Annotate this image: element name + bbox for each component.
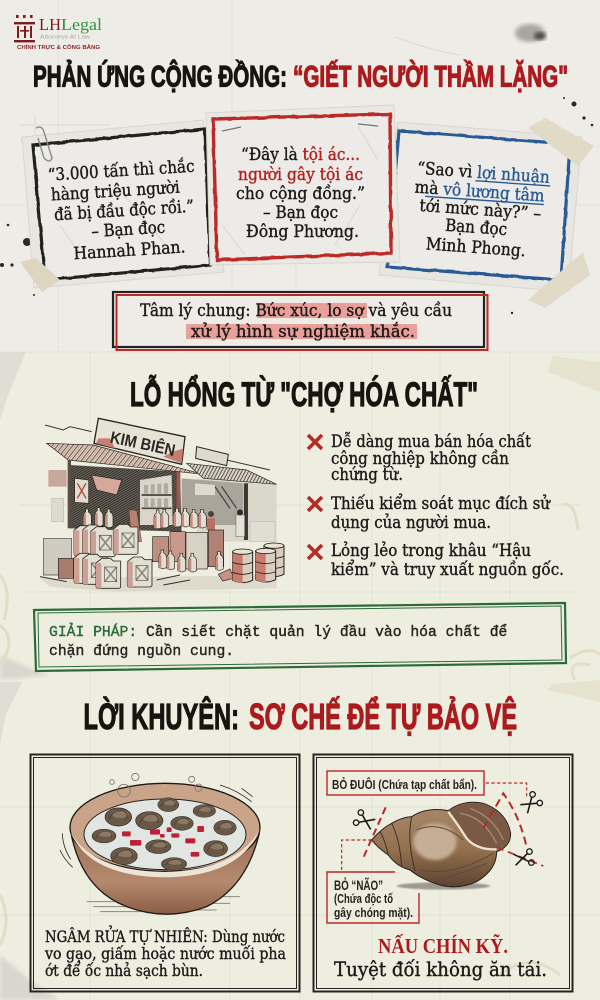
callout: general sentiment: Tâm lý chung: Bức xúc, lo sợ và yêu cầu [140, 301, 452, 320]
illustration: Kim Biên market stall [40, 418, 284, 592]
panel: quote card left: – Bạn đọc [91, 218, 166, 242]
text: loopholes: dụng của người mua. [331, 513, 491, 532]
text: soaking advice: vo gạo, giấm hoặc nước muối pha [44, 944, 286, 963]
panel: quote card left: đã bị đầu độc rồi.” [54, 197, 195, 225]
label: remove tail: BỎ ĐUÔI (Chứa tạp chất bẩn). [332, 777, 477, 792]
panel: preparing the snail [314, 754, 572, 992]
illustration: bowl of snails [60, 773, 260, 914]
text: loopholes: Lỏng lẻo trong khâu “Hậu [331, 541, 531, 560]
label: remove brain: gây chóng mặt). [334, 906, 413, 920]
logo: LHLegal: LH [39, 15, 61, 34]
text: soaking advice: ớt để ốc nhả sạch bùn. [45, 961, 203, 980]
text: soaking advice [44, 924, 286, 980]
text: loopholes [331, 432, 564, 579]
logo: LHLegal: Legal [61, 15, 102, 34]
callout: solution: GIẢI PHÁP: Cần siết chặt quản lý đầu vào hóa chất để [49, 623, 507, 641]
callout: general sentiment: xử lý hình sự nghiệm khắc. [191, 322, 415, 341]
label: remove tail [327, 771, 484, 795]
callout: general sentiment [113, 292, 488, 350]
text: loopholes: Thiếu kiểm soát mục đích sử [331, 494, 551, 513]
text: loopholes: công nghiệp không cần [331, 449, 509, 468]
heading: advice [84, 695, 517, 737]
illustration: Kim Biên market stall: KIM BIÊN [108, 428, 177, 460]
icon: red cross two [308, 497, 322, 511]
panel: quote card right: tới mức này?” – [419, 196, 542, 224]
text: cook thoroughly: Tuyệt đối không ăn tái. [334, 958, 547, 981]
panel: quote card right: mà vô lương tâm [414, 178, 545, 207]
callout: solution: chặn đứng nguồn cung. [49, 643, 234, 660]
panel: quote card left: hàng triệu người [50, 178, 181, 205]
text: loopholes: Dễ dàng mua bán hóa chất [331, 432, 531, 451]
text: loopholes: kiểm” và truy xuất nguồn gốc. [331, 560, 564, 579]
heading: advice: LỜI KHUYÊN: [84, 695, 239, 737]
text: cook thoroughly [334, 934, 547, 981]
panel: quote card center [206, 105, 400, 265]
label: remove brain: BỎ “NÃO” [334, 876, 383, 893]
label: remove brain: (Chứa độc tố [334, 892, 393, 906]
title: public reaction: PHẢN ỨNG CỘNG ĐỒNG: [33, 60, 287, 94]
callout: solution [34, 603, 566, 671]
icon: red cross one [308, 435, 322, 449]
title: public reaction [33, 60, 568, 94]
icon: red cross three [308, 545, 322, 559]
panel: quote card center: cho cộng đồng.” [236, 184, 365, 204]
panel: quote card left [20, 120, 224, 292]
panel: quote card right [379, 118, 594, 308]
logo: LHLegal: Attorneys At Law [40, 34, 91, 40]
panel: quote card right: Bạn đọc [444, 216, 508, 240]
list: market loopholes [308, 432, 564, 579]
text: cook thoroughly: NẤU CHÍN KỸ. [378, 934, 508, 958]
label: remove brain [327, 872, 419, 923]
panel: quote card center: Đông Phương. [246, 222, 359, 242]
logo: LHLegal [14, 15, 102, 51]
panel: quote card right: Minh Phong. [425, 234, 526, 261]
panel: quote card center: người gây tội ác [238, 165, 363, 185]
text: loopholes: chứng từ. [331, 465, 403, 484]
panel: quote card center: – Bạn đọc [263, 203, 338, 223]
logo: LHLegal: CHÍNH TRỰC & CÔNG BẰNG [17, 43, 100, 51]
panel: quote card left: “3.000 tấn thì chắc [47, 157, 195, 186]
panel: quote card left: Hannah Phan. [73, 237, 186, 264]
illustration: snail [342, 783, 544, 890]
panel: quote card right: “Sao vì lợi nhuận [416, 159, 550, 188]
panel: natural soaking [30, 754, 300, 992]
panel: quote card center: “Đây là tội ác... [241, 145, 360, 165]
text: soaking advice: NGÂM RỬA TỰ NHIÊN: Dùng nước [45, 924, 285, 946]
